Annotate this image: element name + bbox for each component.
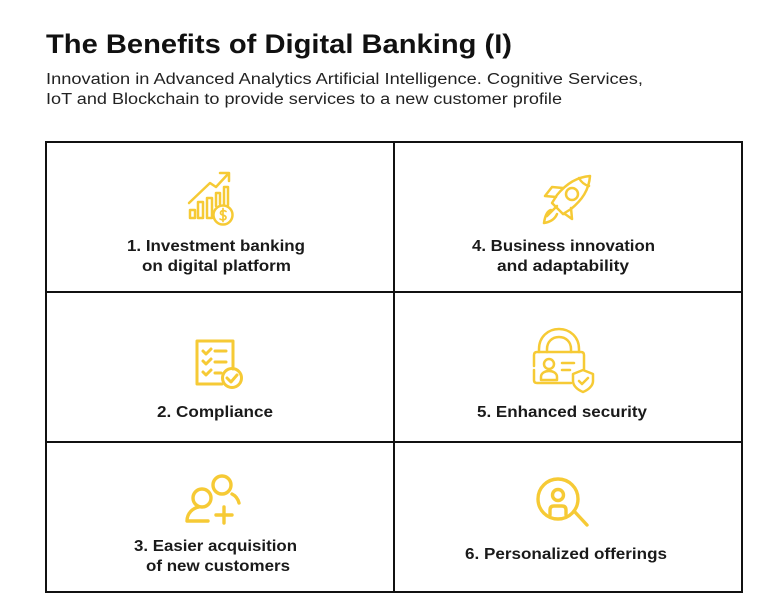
label xyxy=(127,238,305,275)
icon: lock with id and shield xyxy=(534,329,593,392)
label xyxy=(134,538,297,575)
label: 2. Compliance xyxy=(157,404,273,421)
label: and adaptability xyxy=(497,258,629,275)
subtitle: IoT and Blockchain to provide services to a new customer profile xyxy=(46,91,562,108)
label xyxy=(472,238,655,275)
label: 4. Business innovation xyxy=(472,238,655,255)
title: The Benefits of Digital Banking (I) xyxy=(46,29,512,59)
panel: investment banking xyxy=(127,173,305,275)
label: 1. Investment banking xyxy=(127,238,305,255)
panel: enhanced security xyxy=(477,329,647,421)
label: of new customers xyxy=(146,558,290,575)
icon: growth chart with coin xyxy=(189,173,232,224)
icon: magnifier with person xyxy=(538,479,587,525)
label: 3. Easier acquisition xyxy=(134,538,297,555)
icon: checklist xyxy=(197,341,242,388)
label: on digital platform xyxy=(142,258,291,275)
panel: business innovation xyxy=(472,176,655,275)
subtitle: Innovation in Advanced Analytics Artificial Intelligence. Cognitive Services, xyxy=(46,71,643,88)
label: 5. Enhanced security xyxy=(477,404,647,421)
icon: users with plus xyxy=(187,476,239,523)
subtitle xyxy=(46,71,643,108)
panel: personalized offerings xyxy=(465,479,667,563)
label: 6. Personalized offerings xyxy=(465,546,667,563)
panel: customer acquisition xyxy=(134,476,297,575)
benefits grid xyxy=(46,142,742,592)
icon: rocket xyxy=(544,176,590,223)
panel: compliance xyxy=(157,341,273,421)
